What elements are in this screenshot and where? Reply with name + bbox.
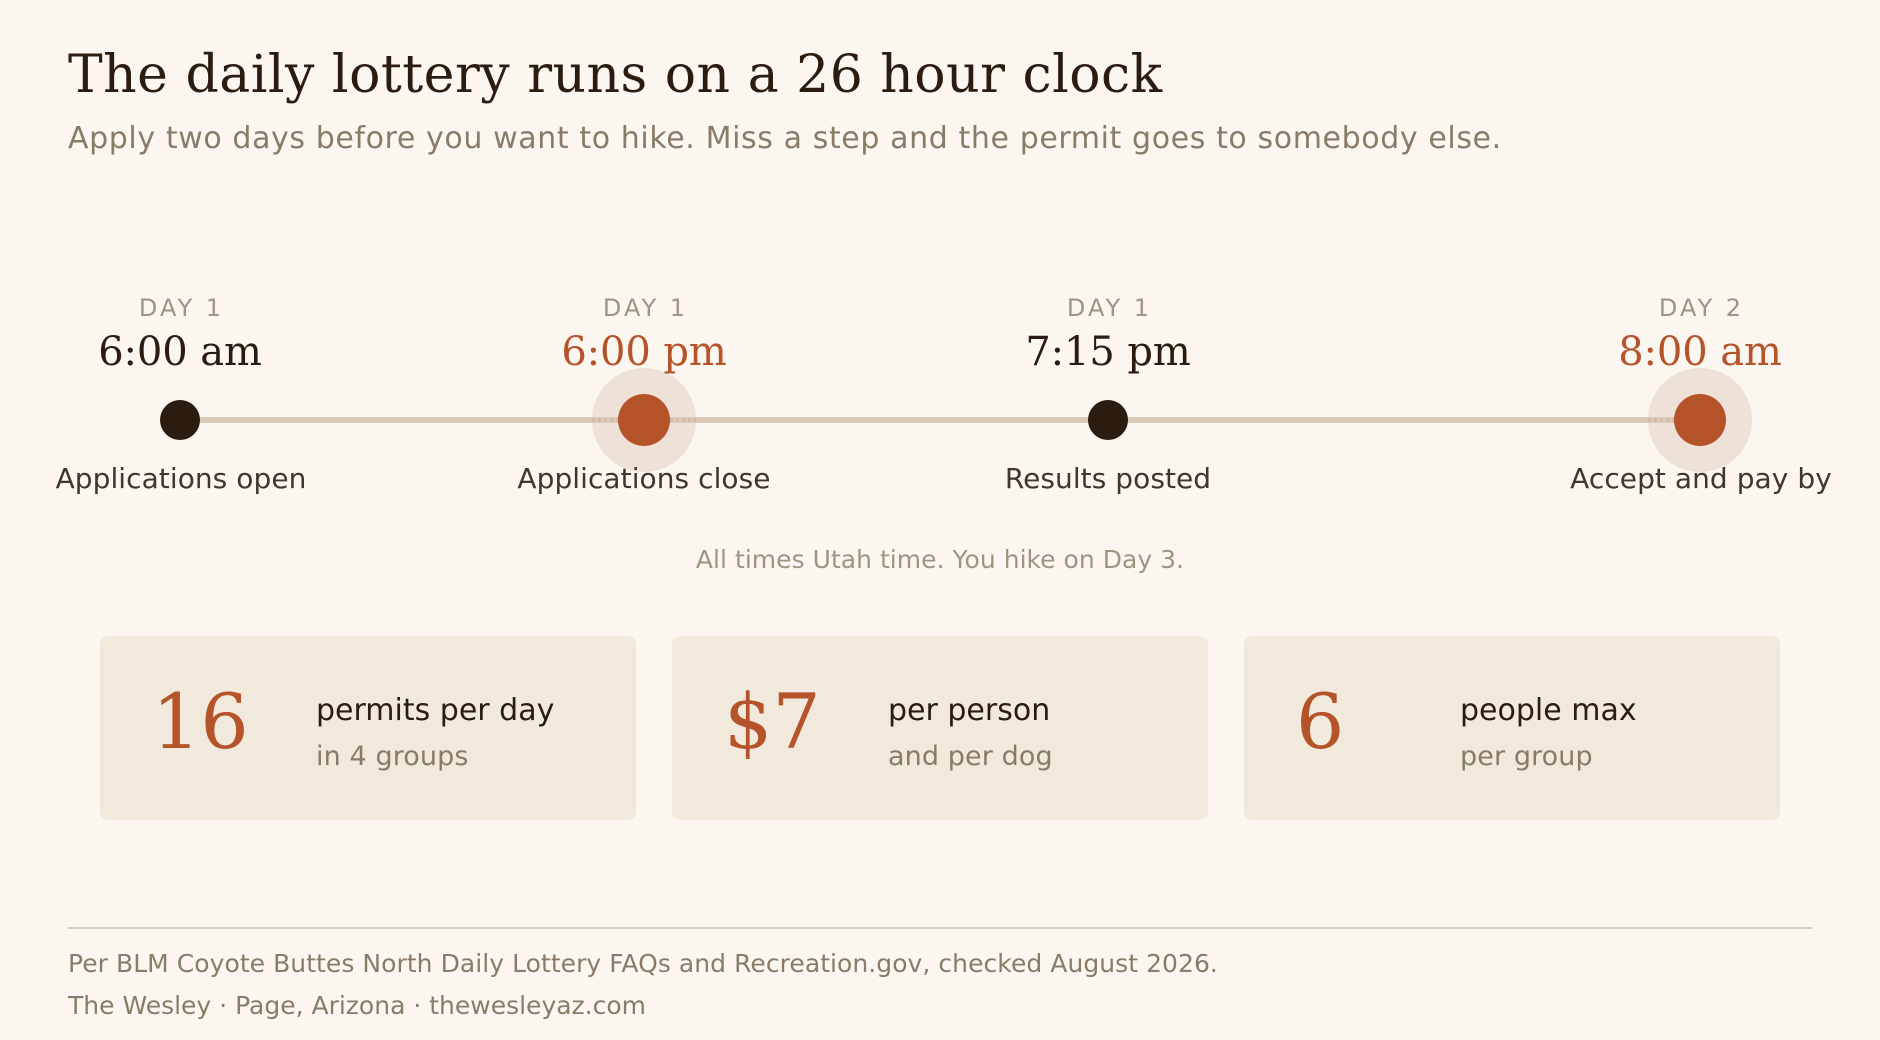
card: group size (1244, 636, 1780, 820)
card: group size: 6 (1296, 677, 1344, 766)
milestone: applications close: DAY 1 (603, 294, 688, 322)
milestone: applications close: 6:00 pm (561, 329, 727, 375)
card: group size: per group (1460, 741, 1593, 772)
milestone: applications open: Applications open (56, 462, 306, 495)
footer (68, 949, 1218, 1020)
card: permits (100, 636, 636, 820)
card: permits: permits per day (316, 693, 554, 728)
milestone: applications open (56, 294, 306, 495)
milestone: applications close: Applications close (517, 462, 771, 495)
milestone: applications open: DAY 1 (139, 294, 224, 322)
milestone: results posted: Results posted (1005, 462, 1211, 495)
card: price: and per dog (888, 741, 1053, 772)
milestone: results posted: 7:15 pm (1025, 329, 1191, 375)
footer: The Wesley · Page, Arizona · thewesleyaz.com (68, 991, 646, 1020)
milestone: applications close (517, 294, 771, 495)
card: permits: 16 (152, 677, 249, 766)
milestone: accept and pay: DAY 2 (1659, 294, 1744, 322)
card: permits: in 4 groups (316, 741, 469, 772)
milestone: accept and pay (1570, 294, 1832, 495)
card: price: $7 (724, 677, 821, 766)
milestone: accept and pay: 8:00 am (1618, 329, 1782, 375)
card: group size: people max (1460, 693, 1637, 728)
card: price: per person (888, 693, 1050, 728)
milestone: results posted (1005, 294, 1211, 495)
milestone: applications open: 6:00 am (98, 329, 262, 375)
subtitle: Apply two days before you want to hike. Miss a step and the permit goes to somebody else. (68, 120, 1502, 156)
milestone: accept and pay: Accept and pay by (1570, 462, 1832, 495)
milestone: results posted: DAY 1 (1067, 294, 1152, 322)
title: The daily lottery runs on a 26 hour clock (68, 45, 1163, 105)
card: price (672, 636, 1208, 820)
timezone note: All times Utah time. You hike on Day 3. (696, 545, 1184, 574)
timeline (56, 294, 1832, 495)
footer: Per BLM Coyote Buttes North Daily Lottery FAQs and Recreation.gov, checked August 2026. (68, 949, 1218, 978)
